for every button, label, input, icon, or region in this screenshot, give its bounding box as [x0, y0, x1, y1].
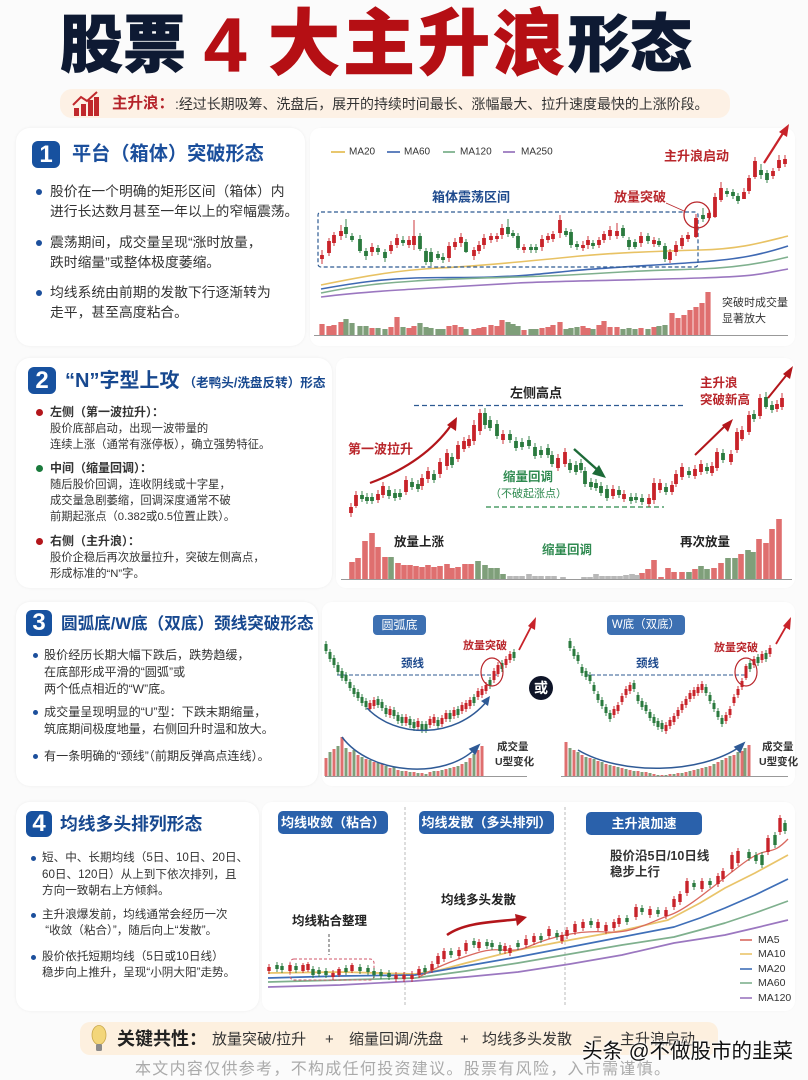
subtitle label: 主升浪：: [112, 95, 174, 112]
badge 4: 4: [32, 810, 46, 837]
bullet 4.1: 60日、120日）从上到下依次排列，且: [42, 868, 237, 880]
volume notes: 成交量: [762, 740, 794, 753]
bullet 4.2: “收敛（粘合）”，随后向上“发散”。: [45, 924, 217, 937]
breakout circle: [666, 202, 710, 228]
right wave text: 右侧（主升浪）：: [50, 534, 140, 548]
chart 1: platform breakout: [314, 124, 789, 336]
neckline labels: 颈线: [401, 656, 424, 670]
subtitle text: :经过长期吸筹、洗盘后，展开的持续时间最长、涨幅最大、拉升速度最快的上涨阶段。: [175, 96, 708, 112]
panel 1: chart background: [310, 128, 795, 346]
panel 2: text card: [16, 358, 332, 588]
volume bars: [314, 292, 788, 336]
key commonality label: 关键共性：: [117, 1029, 207, 1049]
bullet 1: 股价在一个明确的矩形区间（箱体）内: [50, 184, 285, 199]
label: first wave: 第一波拉升: [348, 442, 413, 456]
label: main wave start: 主升浪启动: [664, 148, 729, 164]
panel 3: chart background: [322, 602, 795, 786]
icon: rising chart: [72, 91, 99, 116]
bullet 4.1: 短、中、长期均线（5日、10日、20日、: [42, 851, 248, 864]
icon: light bulb: [92, 1025, 106, 1051]
arc arrow over candles: [367, 696, 490, 730]
left wave text: 连续上涨（通常有涨停板），确立强势特征。: [50, 439, 270, 451]
formula: 放量突破/拉升: [212, 1031, 306, 1048]
bullet 3.2: 筑底期间极度地量，右侧回升时温和放大。: [44, 722, 274, 736]
heading 3: 圆弧底/W底（双底）颈线突破形态: [61, 614, 314, 633]
title: 大主升浪: [268, 5, 568, 85]
volume: rounded bottom: [325, 737, 527, 776]
legend: MA120: [758, 992, 791, 1004]
label: price follows: 股价沿5日/10日线: [610, 848, 710, 863]
candles: [322, 155, 785, 266]
badge 4: [26, 811, 52, 837]
panel 4: text card: [16, 802, 259, 1011]
title: [60, 3, 692, 88]
bullet 2: [36, 235, 262, 270]
bullet 4.2: 主升浪爆发前，均线通常会经历一次: [42, 908, 228, 921]
label: main wave new high: 主升浪: [700, 375, 738, 390]
legend: MA250: [521, 146, 553, 158]
badge 3: [26, 610, 52, 636]
arrow: pullback: [574, 449, 606, 478]
formula: 主升浪启动: [620, 1031, 695, 1048]
watermark: 头条 @不做股市的韭菜: [582, 1040, 793, 1063]
badge 2: 2: [35, 367, 49, 394]
legend: MA60: [404, 146, 431, 158]
pill: W bottom: W底（双底）: [612, 617, 680, 631]
panel 1: text card: [16, 128, 305, 346]
middle wave text: 中间（缩量回调）：: [50, 461, 152, 475]
bullet 4.3: 稳步向上推升，呈现“小阴大阳”走势。: [42, 966, 235, 979]
middle wave text: [36, 461, 235, 523]
disclaimer: 本文内容仅供参考，不构成任何投资建议。股票有风险，入市需谨慎。: [135, 1061, 671, 1078]
label: pullback: 缩量回调: [503, 469, 553, 484]
bullet 3.1: 两个低点相近的“W”底。: [44, 682, 172, 696]
arrow up: [764, 124, 789, 163]
bullet 1: [36, 184, 298, 219]
subtitle band: [60, 89, 730, 118]
volume arcs: [342, 737, 744, 769]
bullet 2: 跌时缩量”或整体极度萎缩。: [50, 255, 220, 270]
title: 股票: [60, 11, 186, 81]
label: price follows: 稳步上行: [610, 864, 660, 879]
formula: 均线多头发散: [482, 1031, 572, 1048]
bullet 3.3: 有一条明确的“颈线”（前期反弹高点连线）。: [44, 748, 270, 762]
red arrows: [519, 617, 791, 650]
legend: MA20: [349, 146, 376, 158]
legend: [740, 934, 791, 1004]
pill: converge: [278, 811, 388, 834]
formula: =: [593, 1031, 602, 1048]
chart 3: rounded bottom and W bottom: [324, 615, 799, 777]
support dashed line: [486, 506, 664, 508]
panel 3: text card: [16, 602, 318, 786]
bullet 3.1: 在底部形成平滑的“圆弧”或: [44, 664, 185, 678]
or circle: [529, 676, 553, 700]
dividers: [405, 807, 565, 1005]
heading 4: 均线多头排列形态: [60, 814, 202, 834]
legend: MA60: [758, 977, 786, 989]
bullet 3: 走平，甚至高度粘合。: [50, 305, 188, 320]
arrow: diverge: [447, 914, 527, 935]
label: box range: 箱体震荡区间: [432, 190, 510, 204]
legend: MA120: [460, 146, 492, 158]
right wave text: 形成标准的“N”字。: [50, 568, 145, 580]
bullet 3.2: [33, 704, 274, 736]
consolidation box: [318, 212, 698, 267]
pill: rounded bottom: 圆弧底: [381, 617, 418, 632]
badge 1: 1: [39, 141, 53, 168]
badge 3: 3: [32, 609, 46, 636]
label: volume up: 放量上涨: [394, 534, 445, 549]
left wave text: 左侧（第一波拉升）：: [50, 405, 164, 419]
arrow: first wave: [370, 417, 457, 483]
bullet 4.3: [31, 950, 235, 979]
pill: accelerate: [586, 812, 702, 835]
volume: W bottom: [561, 742, 788, 776]
title: 形态: [568, 11, 692, 80]
pointer: [328, 934, 330, 955]
middle wave text: 前期起涨点（0.382或0.5位置止跌）。: [50, 511, 235, 523]
bullet 1: 进行长达数月甚至一年以上的窄幅震荡。: [50, 204, 298, 219]
necklines: [337, 674, 746, 676]
legend: MA10: [758, 948, 786, 960]
right wave text: [36, 534, 265, 580]
candles: W bottom: [570, 638, 770, 734]
moving averages: [321, 236, 788, 297]
bullet 3: 均线系统由前期的发散下行逐渐转为: [50, 285, 271, 300]
label: left high: 左侧高点: [510, 386, 562, 400]
footer band: [80, 1022, 718, 1055]
panel 4: chart background: [262, 802, 795, 1011]
label: pullback: （不破起涨点）: [490, 486, 567, 500]
panel 2: chart background: [336, 358, 795, 588]
or circle: 或: [534, 680, 548, 696]
legend: MA5: [758, 934, 780, 946]
formula: +: [460, 1031, 469, 1048]
volume notes: [495, 740, 799, 768]
breakout circles: [481, 658, 757, 686]
bullet 3.2: 成交量呈现明显的“U”型：下跌末期缩量，: [44, 704, 266, 718]
pill: accelerate: 主升浪加速: [611, 816, 677, 831]
volume note: 显著放大: [722, 311, 766, 325]
candles: [269, 815, 785, 982]
neckline labels: 颈线: [636, 656, 659, 670]
legend: [331, 146, 553, 158]
candles: rounded bottom: [326, 641, 514, 733]
volume note: 突破时成交量: [722, 295, 788, 309]
chart 2: N shape: [341, 366, 793, 580]
bullet 2: 震荡期间，成交量呈现“涨时放量，: [50, 235, 262, 250]
legend: MA20: [758, 963, 786, 975]
bullet 4.3: 股价依托短期均线（5日或10日线）: [42, 950, 224, 963]
heading 1: 平台（箱体）突破形态: [72, 144, 264, 165]
volume notes: U型变化: [759, 755, 799, 768]
volume notes: U型变化: [495, 755, 535, 768]
formula: [212, 1031, 695, 1048]
label: volume breakout: 放量突破: [614, 190, 666, 204]
moving averages: [268, 839, 788, 987]
left wave text: [36, 405, 270, 451]
volume bars: [341, 519, 792, 580]
middle wave text: 随后股价回调，连收阴线或十字星，: [50, 479, 231, 491]
convergence zone: [290, 959, 374, 980]
bullet 4.2: [31, 908, 228, 937]
label: converge: 均线粘合整理: [292, 913, 368, 928]
label: volume again: 再次放量: [680, 534, 730, 549]
bullet 4.1: [31, 851, 248, 897]
breakout labels: 放量突破: [463, 638, 507, 652]
middle wave text: 成交量急剧萎缩，回调深度通常不破: [50, 495, 231, 507]
neckline labels: [401, 656, 659, 670]
bullet 3.1: [33, 648, 250, 696]
bullet 3.1: 股价经历长期大幅下跌后，跌势趋缓，: [44, 648, 250, 662]
bullet 3: [36, 285, 271, 320]
left high dashed line: [414, 404, 683, 406]
pill: converge: 均线收敛（粘合）: [281, 815, 385, 830]
pill: W bottom: [607, 615, 685, 635]
heading 2: “N”字型上攻 （老鸭头/洗盘反转）形态: [65, 370, 325, 392]
label: diverge: 均线多头发散: [441, 892, 517, 907]
arrow: rising leg: [695, 419, 733, 455]
pill: diverge: [419, 811, 554, 834]
bullet 4.1: 方向一致朝右上方倾斜。: [42, 884, 170, 897]
right wave text: 股价企稳后再次放量拉升，突破左侧高点，: [50, 552, 265, 564]
breakout labels: 放量突破: [714, 640, 758, 654]
left wave text: 股价底部启动，出现一波带量的: [50, 423, 208, 435]
arrow: new high: [768, 366, 793, 398]
pill: rounded bottom: [373, 615, 426, 635]
pill: diverge: 均线发散（多头排列）: [421, 815, 552, 830]
volume notes: 成交量: [497, 740, 529, 753]
badge 1: [32, 141, 60, 168]
formula: +: [325, 1031, 334, 1048]
chart 4: bullish alignment: [267, 807, 791, 1005]
badge 2: [28, 367, 56, 394]
candles: [351, 392, 782, 517]
label: main wave new high: 突破新高: [700, 392, 750, 407]
formula: 缩量回调/洗盘: [349, 1031, 443, 1048]
breakout labels: [463, 638, 758, 654]
label: volume shrink: 缩量回调: [542, 542, 592, 557]
title: 4: [204, 3, 246, 88]
